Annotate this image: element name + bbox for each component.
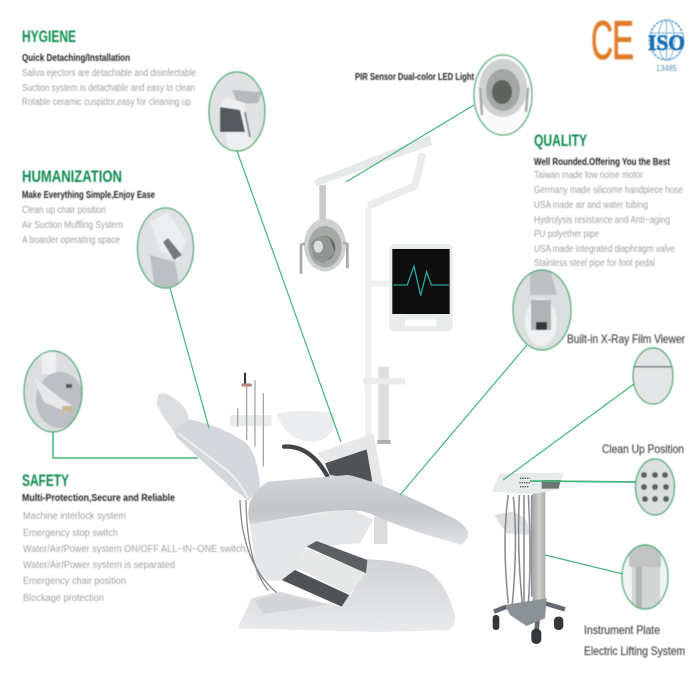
certification: ISO 13485: ISO: [648, 30, 685, 55]
cart control panel: [492, 473, 563, 494]
hoses: [240, 500, 277, 593]
cart base: [494, 598, 565, 630]
text block: humanization: Air Suction Muffling System: [22, 220, 123, 231]
text block: quality: QUALITY: [534, 132, 587, 150]
seat back panel: [317, 433, 384, 488]
text block: hygiene: HYGIENE: [22, 28, 76, 46]
certification: CE mark: E: [612, 9, 634, 71]
text block: humanization: HUMANIZATION: [22, 168, 122, 186]
text block: humanization: A boarder operating space: [22, 235, 120, 246]
text block: safety: Machine interlock system: [23, 511, 126, 522]
holder: [494, 512, 529, 535]
text block: quality: Stainless steel pipe for foot pedal: [534, 258, 655, 269]
text block: safety: SAFETY: [22, 472, 69, 490]
instrument tray: [230, 373, 272, 467]
monitor mount: [365, 281, 389, 287]
detail circle: lifting column: [621, 543, 670, 611]
lamp neck: [319, 185, 326, 220]
text block: hygiene: Rotable ceramic cuspidor,easy for cleaning up: [22, 97, 191, 108]
instrument cart: [492, 473, 565, 644]
text block: safety: Multi-Protection,Secure and Reliable: [22, 493, 175, 504]
lamp boom: [314, 135, 432, 186]
monitor: [389, 244, 453, 331]
text block: hygiene: Suction system is detachable and easy to clean: [22, 83, 195, 94]
instrument post: [363, 367, 405, 444]
text block: safety: Water/Air/Power system ON/OFF ALL−IN−ONE switch,: [23, 544, 248, 555]
text block: humanization: [22, 168, 155, 246]
text block: humanization: Clean up chair position: [22, 205, 106, 216]
lift bellows middle: [297, 548, 366, 594]
detail circle: clean up: [632, 347, 675, 405]
cuspidor: [277, 411, 335, 442]
certification: CE mark: C: [591, 9, 613, 71]
headrest: [157, 393, 189, 431]
text block: safety: [22, 472, 248, 604]
text block: safety: Emergency stop switch: [23, 528, 118, 539]
text block: hygiene: Quick Detaching/Installation: [22, 53, 130, 64]
text block: quality: Hydrolysis resistance and Anti−aging: [534, 215, 670, 226]
chair base: [238, 559, 455, 632]
detail circle: LED light: [472, 53, 534, 138]
dark lift bellows upper: [307, 541, 367, 573]
chair support: [374, 517, 387, 544]
callout: electric lifting system: Electric Lifting System: [584, 644, 685, 658]
callout: electric lifting system: Instrument Plate: [584, 623, 660, 637]
text block: safety: Blockage protection: [23, 593, 104, 604]
text block: quality: Taiwan made low noise motor: [534, 170, 644, 181]
dental lamp arm and monitor unit: [301, 135, 453, 444]
text block: quality: Well Rounded.Offering You the Best: [534, 157, 671, 168]
suction arm: [284, 447, 327, 476]
callout: LED light: PIR Sensor Dual-color LED Light: [355, 72, 475, 83]
detail circle: control buttons: [634, 458, 676, 516]
cart column: [533, 490, 545, 603]
backrest: [173, 419, 260, 501]
text block: quality: [534, 132, 683, 269]
leader lines: [53, 105, 636, 574]
dental chair: [157, 373, 468, 632]
detail circle: hygiene: [208, 70, 266, 152]
dark lift bellows lower: [282, 570, 349, 607]
upper arm: [368, 153, 423, 206]
callout: clean up position: Clean Up Position: [602, 442, 684, 456]
detail circle: humanization: [135, 205, 197, 291]
detail circle: safety: [22, 349, 84, 434]
lamp head: [301, 219, 347, 274]
callout: electric lifting system: [584, 623, 685, 658]
detail circle: X-ray film viewer: [511, 268, 574, 352]
text block: quality: PU polyether pipe: [534, 229, 599, 240]
text block: humanization: Make Everything Simple,Enjoy Ease: [22, 190, 155, 201]
certification: ISO 13485: 13485: [656, 64, 678, 73]
certification: ISO 13485: [648, 20, 685, 73]
text block: safety: Emergency chair position: [23, 576, 126, 587]
text block: quality: USA made air and water tubing: [534, 200, 648, 211]
backrest trim: [178, 433, 248, 498]
text block: safety: Water/Air/Power system is separated: [23, 560, 175, 571]
lower body: [250, 507, 373, 581]
seat and leg rest: [248, 475, 468, 545]
dark back panel: [325, 449, 372, 482]
cart hoses: [505, 495, 532, 613]
text block: hygiene: Saliva ejectors are detachable and disinfectable: [22, 68, 196, 79]
base tray: [255, 593, 327, 614]
text block: hygiene: [22, 28, 196, 108]
wheels: [493, 615, 563, 644]
support pole: [365, 205, 372, 437]
